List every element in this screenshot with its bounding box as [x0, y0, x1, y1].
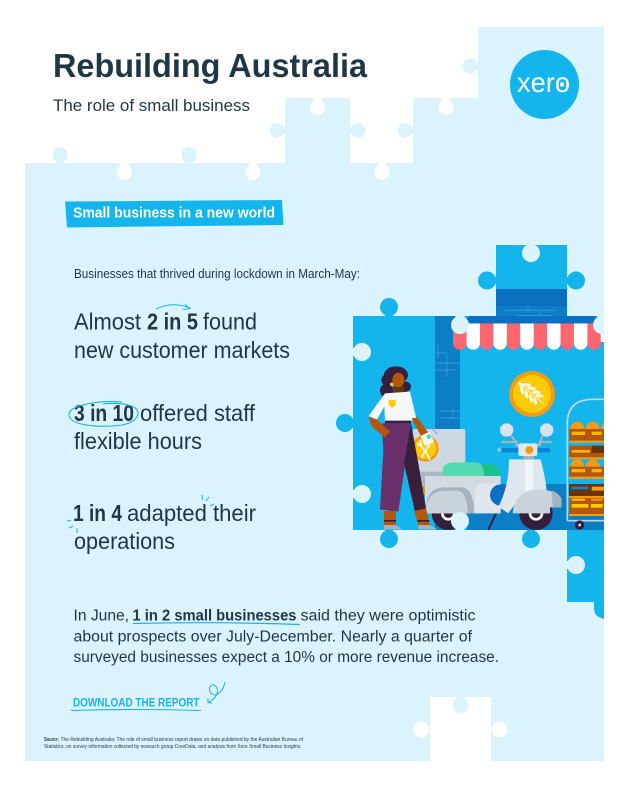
paragraph: optimism: said they were optimistic: [300, 608, 476, 624]
stat: 3 in 10: flexible hours: [74, 428, 202, 454]
delivery scooter: [412, 423, 561, 530]
paragraph: optimism: [74, 608, 499, 666]
heading tag: small business in a new world: Small business in a new world: [73, 206, 275, 222]
stat: 3 in 10: offered staff: [140, 400, 256, 426]
illustration: shop scene: [336, 244, 613, 619]
heading tag: small business in a new world: [65, 200, 284, 228]
stat: 1 in 4: [67, 495, 256, 554]
brick column: [435, 316, 460, 530]
logo: xero: [510, 50, 579, 119]
floor: [467, 484, 604, 530]
paragraph: optimism: In June,: [74, 608, 129, 624]
paragraph: optimism: 1 in 2 small businesses: [132, 608, 296, 624]
title: Rebuilding Australia: [53, 47, 368, 84]
stat: 2 in 5: 2 in 5: [147, 308, 198, 334]
panel: white puzzle piece bottom: [414, 696, 508, 761]
paragraph: optimism: surveyed businesses expect a 10% or more revenue increase.: [74, 649, 499, 666]
intro text: Businesses that thrived during lockdown in March-May:: [74, 267, 360, 281]
sign: wheat coin: [509, 371, 555, 417]
chimney puzzle piece: [478, 244, 585, 317]
source note: The Rebuilding Australia: The role of small business report draws on data published by the Australian Bureau of: [60, 737, 303, 743]
stat: 2 in 5: [74, 304, 290, 363]
puzzle cut-outs: [352, 315, 611, 574]
logo: xero: xero: [517, 67, 570, 98]
stat: 3 in 10: 3 in 10: [74, 400, 134, 426]
link: download the report: DOWNLOAD THE REPORT: [73, 696, 200, 710]
stat: 1 in 4: adapted their: [127, 500, 256, 526]
source note: [44, 737, 303, 750]
bread trolley: [566, 398, 604, 530]
stat: 2 in 5: Almost: [74, 308, 142, 334]
icon: curly arrow: [208, 682, 225, 703]
stat: 1 in 4: 1 in 4: [73, 500, 122, 526]
source note: Source:: [44, 737, 59, 743]
stat: 1 in 4: operations: [74, 528, 175, 554]
subtitle: The role of small business: [53, 96, 250, 115]
stat: 2 in 5: found: [203, 308, 257, 334]
stat: 2 in 5: new customer markets: [74, 337, 290, 363]
shop front puzzle piece: [336, 298, 604, 619]
awning: [453, 316, 605, 350]
paragraph: optimism: about prospects over July-December. Nearly a quarter of: [74, 628, 473, 646]
source note: Statistics, on survey information collected by research group CoreData, and analysis from Xero Small Business Insights.: [44, 744, 302, 750]
stat: 3 in 10: [69, 400, 256, 454]
woman holding phone: [369, 366, 438, 529]
